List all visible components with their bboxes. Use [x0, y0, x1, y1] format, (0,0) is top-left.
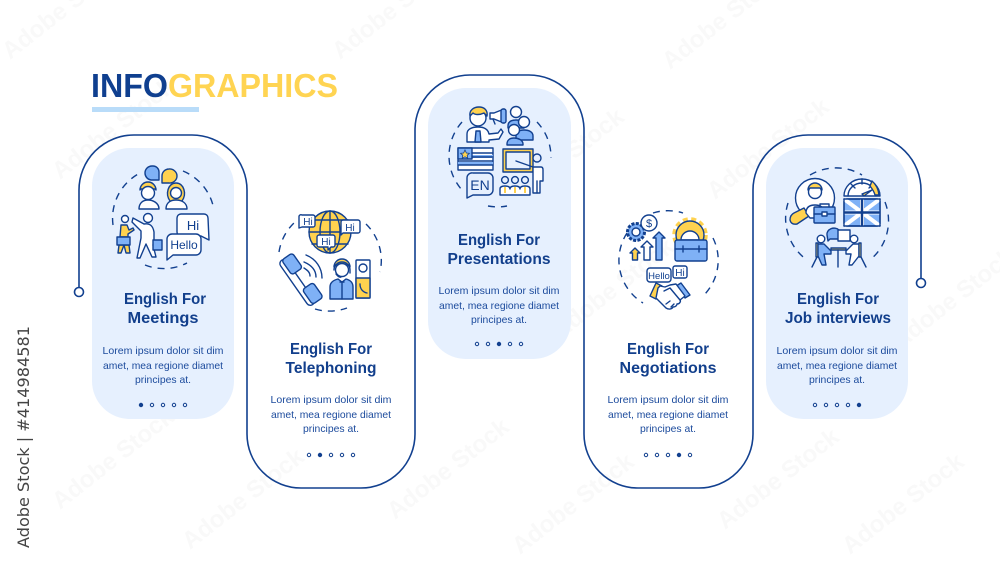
heading: English For	[797, 291, 879, 308]
panel: English for presentations	[428, 88, 571, 359]
body text: amet, mea regione diamet	[103, 360, 223, 372]
body text: principes at.	[303, 423, 359, 435]
body text	[438, 285, 560, 326]
panel: English for telephoning	[270, 211, 392, 457]
icon: negotiations	[619, 211, 718, 309]
text: Adobe Stock	[382, 413, 515, 525]
pagination dots	[475, 342, 523, 346]
heading	[620, 341, 717, 377]
icon: negotiations: Hello	[648, 271, 670, 282]
side label: stock id: Adobe Stock | #414984581	[14, 326, 33, 548]
body text: principes at.	[809, 374, 865, 386]
body text: amet, mea regione diamet	[777, 360, 897, 372]
pagination dots	[644, 453, 692, 457]
body text: amet, mea regione diamet	[439, 300, 559, 312]
heading: Presentations	[448, 251, 551, 268]
icon: presentations: EN	[470, 177, 490, 193]
panel: English for meetings	[92, 148, 234, 419]
text: Adobe Stock	[547, 233, 680, 345]
icon: telephoning: Hi	[303, 217, 313, 228]
icon: negotiations: $	[646, 218, 652, 230]
body text: amet, mea regione diamet	[271, 409, 391, 421]
connecting snake outline	[74, 75, 926, 488]
icon: presentations	[449, 106, 551, 207]
text: Adobe Stock	[177, 443, 310, 555]
icon: telephoning: Hi	[321, 237, 331, 248]
text: Adobe Stock	[47, 403, 180, 515]
icon: meetings: Hi	[187, 218, 199, 233]
icon: negotiations: Hi	[675, 268, 685, 279]
pagination dots	[813, 403, 861, 407]
heading: Telephoning	[286, 360, 376, 377]
heading: English For	[458, 232, 540, 249]
body text: principes at.	[471, 314, 527, 326]
body text: Lorem ipsum dolor sit dim	[608, 394, 729, 406]
heading	[448, 232, 551, 268]
body text: Lorem ipsum dolor sit dim	[270, 394, 392, 406]
pagination dots	[307, 453, 355, 457]
body text: Lorem ipsum dolor sit dim	[776, 345, 898, 357]
text: Adobe Stock	[47, 73, 180, 185]
icon: telephoning: Hi	[345, 223, 355, 234]
heading	[124, 291, 206, 327]
text: Adobe Stock	[837, 448, 970, 560]
heading: English For	[124, 291, 206, 308]
body text	[102, 345, 224, 386]
panel: English for job interviews	[766, 148, 908, 419]
body text: Lorem ipsum dolor sit dim	[102, 345, 224, 357]
title: INFOGRAPHICS	[91, 68, 338, 105]
body text: principes at.	[640, 423, 696, 435]
text: Adobe Stock	[507, 448, 640, 560]
body text: principes at.	[135, 374, 191, 386]
heading: English For	[627, 341, 709, 358]
heading: English For	[290, 341, 372, 358]
heading: Negotiations	[620, 360, 717, 377]
text: Adobe Stock	[497, 103, 630, 215]
pagination dots	[139, 403, 187, 407]
body text	[776, 345, 898, 386]
heading	[286, 341, 376, 377]
body text: amet, mea regione diamet	[608, 409, 728, 421]
heading: Meetings	[128, 310, 199, 327]
icon: meetings: Hello	[170, 238, 198, 252]
body text	[608, 394, 729, 435]
body text: Lorem ipsum dolor sit dim	[438, 285, 560, 297]
icon: meetings	[113, 166, 214, 269]
heading	[785, 291, 891, 327]
icon: job interviews	[786, 168, 889, 267]
icon: telephoning	[278, 211, 381, 311]
text: Adobe Stock	[702, 93, 835, 205]
text: Adobe Stock	[712, 423, 845, 535]
heading: Job interviews	[785, 310, 891, 327]
panel: English for negotiations	[608, 211, 729, 457]
body text	[270, 394, 392, 435]
